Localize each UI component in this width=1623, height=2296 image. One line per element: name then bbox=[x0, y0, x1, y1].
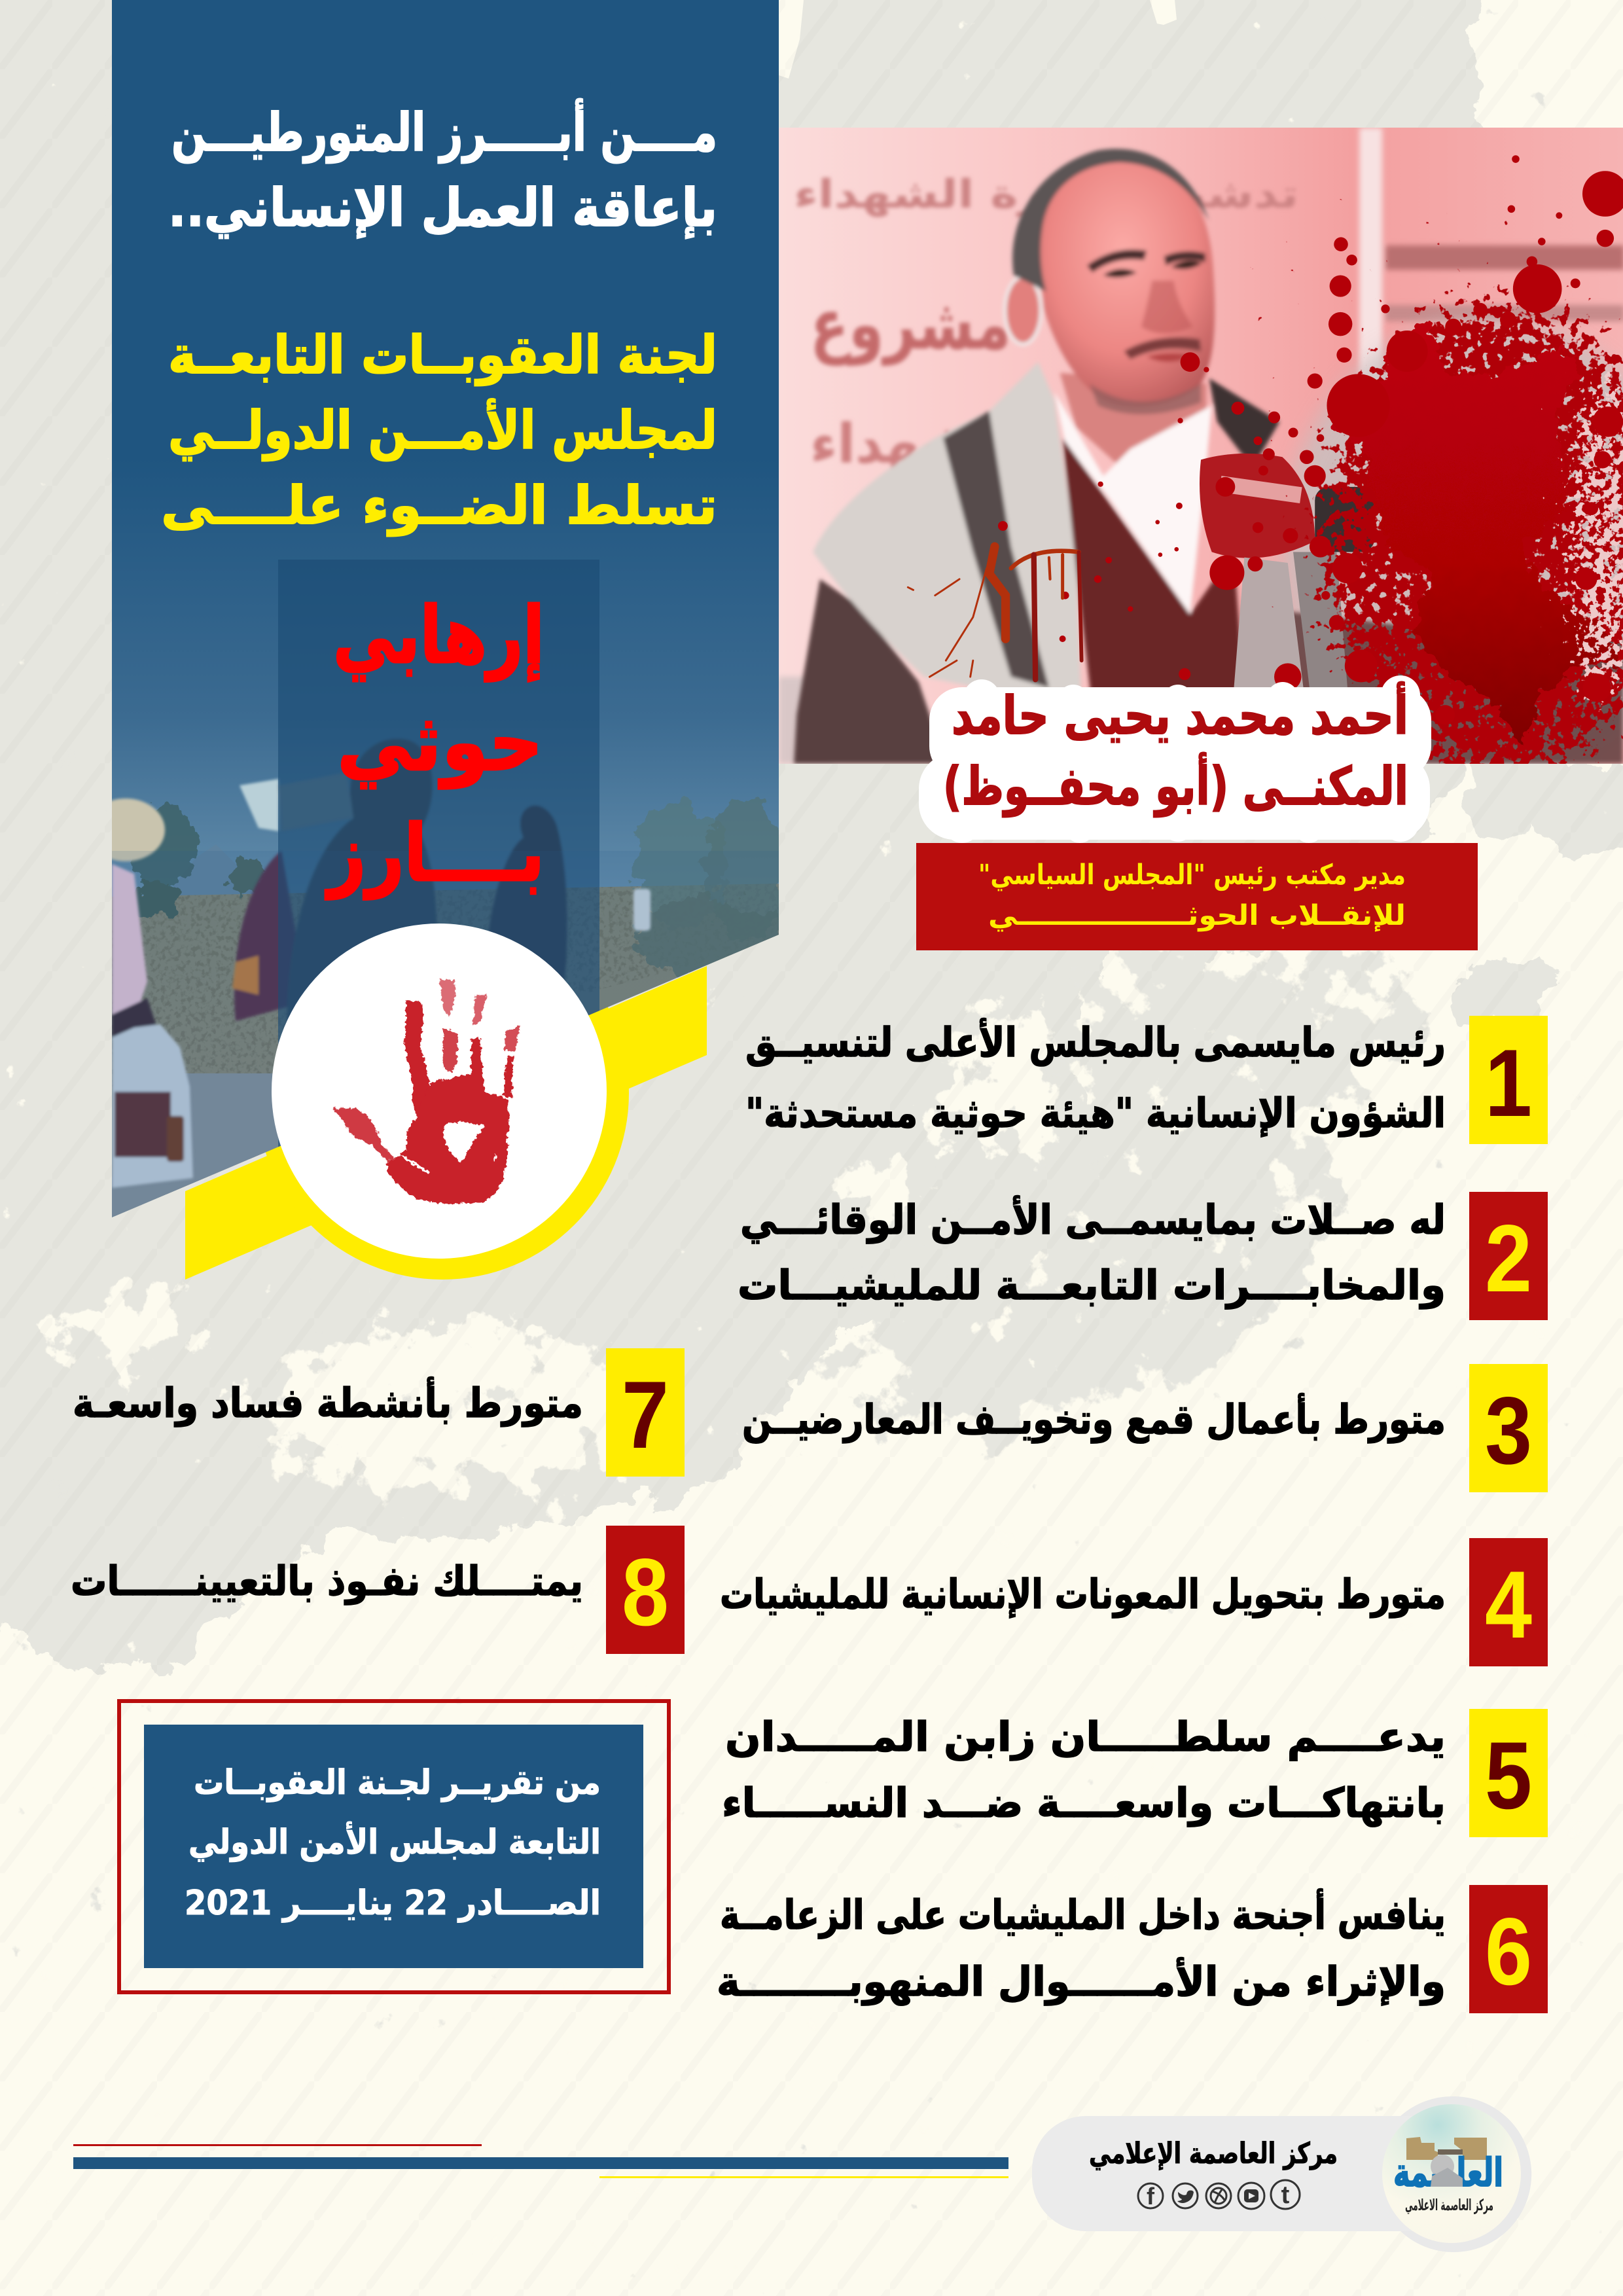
neck bbox=[1060, 373, 1206, 476]
field photo: ground bbox=[112, 884, 779, 1224]
logo: caption: مركز العاصمة الاعلامي bbox=[1405, 2196, 1493, 2214]
title block: yellow heading: تسلط الضــوء علــــى bbox=[161, 475, 717, 537]
list item 5: 5 bbox=[1485, 1722, 1532, 1829]
name plate text: أحمد محمد يحيى حامد bbox=[952, 682, 1408, 746]
title block: yellow heading bbox=[161, 325, 717, 537]
title block: yellow heading: لجنة العقوبــات التابعــة bbox=[168, 325, 717, 386]
list item 6: والإثراء من الأمــــــوال المنهوبــــــــة bbox=[717, 1957, 1446, 2005]
list item 6: ينافس أجنحة داخل المليشيات على الزعامــة bbox=[720, 1888, 1446, 1939]
splatter texture bbox=[1320, 297, 1623, 785]
field photo: bushes and trees bbox=[131, 798, 789, 975]
dark overlay behind red words bbox=[278, 560, 599, 1214]
shawl woven band bbox=[943, 411, 1049, 688]
third figure bbox=[287, 739, 437, 1060]
name plate text bbox=[943, 682, 1408, 817]
field photo: mountain bbox=[173, 876, 252, 895]
blood drops bbox=[998, 155, 1623, 725]
social icons: f bbox=[1147, 2183, 1155, 2210]
list item 5 bbox=[722, 1709, 1548, 1837]
social icons: t bbox=[1281, 2181, 1290, 2209]
name plate: white scalloped background bbox=[919, 675, 1431, 843]
facial features bbox=[1087, 249, 1205, 414]
list item 8 bbox=[71, 1526, 685, 1654]
list item 7 bbox=[73, 1348, 685, 1477]
logo: Al-Asima media center bbox=[1382, 2104, 1521, 2243]
icon: bloody hand print bbox=[332, 980, 520, 1204]
second figure bbox=[234, 851, 308, 1021]
list item 4: متورط بتحويل المعونات الإنسانية للمليشيات bbox=[720, 1570, 1446, 1618]
photo area of grey base under splatter bbox=[1282, 319, 1623, 785]
list item 3 bbox=[742, 1364, 1548, 1492]
pole and building bbox=[779, 128, 1623, 764]
shopping bag bbox=[112, 1024, 193, 1188]
blurred banner text bbox=[794, 172, 1298, 476]
list item 2: 2 bbox=[1485, 1205, 1532, 1312]
title block: red words: بــــارز bbox=[325, 808, 544, 899]
list item 7: متورط بأنشطة فساد واسعـة bbox=[73, 1376, 583, 1427]
blurred banner text: شهداء bbox=[810, 412, 973, 476]
job title box: مدير مكتب رئيس "المجلس السياسي" bbox=[978, 859, 1406, 891]
blurred banner text: تدشين مقبرة الشهداء bbox=[794, 172, 1298, 217]
panel: blue title panel with field photo bbox=[86, 0, 789, 1224]
field photo: sky bbox=[112, 458, 779, 929]
job title box bbox=[916, 843, 1478, 950]
list item 1: 1 bbox=[1485, 1030, 1532, 1136]
title block: white heading: بإعاقة العمل الإنساني.. bbox=[168, 177, 717, 239]
photo: politician with blood splatter bbox=[779, 128, 1623, 785]
source box with red frame: التابعة لمجلس الأمن الدولي bbox=[188, 1821, 601, 1862]
shawl bbox=[813, 362, 1082, 709]
list item 4: 4 bbox=[1485, 1551, 1532, 1658]
logo: outer ring bbox=[1400, 2096, 1531, 2252]
fourth figure bbox=[484, 806, 567, 995]
blood drip on shoulder bbox=[908, 547, 1082, 679]
woman with hat at left bbox=[112, 864, 147, 1021]
photo background bbox=[779, 128, 1623, 764]
photo tint bbox=[112, 851, 779, 1217]
coat sleeve bbox=[794, 579, 946, 764]
ear bbox=[1005, 277, 1041, 344]
blurred banner text: مشروع bbox=[810, 283, 1011, 366]
list item 5: يدعــــم سلطـــــان زابن المـــــدان bbox=[725, 1713, 1446, 1761]
name plate text: المكنــى (أبو محفــوظ) bbox=[943, 753, 1408, 817]
list item 2: له صــلات بمايسمــى الأمــن الوقائـــي bbox=[740, 1195, 1446, 1244]
coat and lower body at right bbox=[1234, 606, 1623, 764]
footer lines bbox=[73, 2144, 1008, 2178]
list item 1: الشؤون الإنسانية "هيئة حوثية مستحدثة" bbox=[745, 1089, 1446, 1137]
list item 1: رئيس مايسمى بالمجلس الأعلى لتنسيــق bbox=[745, 1018, 1446, 1066]
badge: yellow ring bbox=[256, 906, 629, 1280]
list item 7: 7 bbox=[622, 1361, 669, 1468]
yellow ribbon behind hand badge bbox=[185, 966, 707, 1280]
face bbox=[1038, 161, 1215, 406]
field photo: people bbox=[86, 739, 651, 1188]
list item 5: بانتهاكـــات واسعــــة ضـــد النســـــاء bbox=[722, 1779, 1446, 1827]
large blood blot bbox=[1331, 324, 1623, 753]
panel solid blue top bbox=[112, 0, 779, 459]
source box with red frame bbox=[119, 1701, 669, 1992]
logo: grey globe bbox=[1431, 2155, 1454, 2178]
source box with red frame: الصــــادر 22 ينايــــر 2021 bbox=[185, 1884, 601, 1923]
list item 2 bbox=[738, 1192, 1548, 1320]
background world map texture bbox=[0, 0, 1623, 1676]
job title box: للإنقــلاب الحوثـــــــــــــــــي bbox=[988, 899, 1406, 932]
title block: white heading bbox=[168, 99, 717, 239]
distant figure bbox=[633, 889, 651, 931]
field photo: road bbox=[112, 1073, 288, 1217]
footer pill bbox=[1032, 2116, 1490, 2231]
microphones bbox=[1200, 454, 1374, 693]
social icons bbox=[1138, 2180, 1300, 2210]
logo: buildings bbox=[1406, 2137, 1487, 2160]
title block: red words bbox=[325, 590, 544, 899]
footer organisation name: مركز العاصمة الإعلامي bbox=[1089, 2137, 1338, 2170]
list item 4 bbox=[720, 1538, 1548, 1666]
hair bbox=[1012, 149, 1209, 291]
shirt bbox=[1054, 392, 1212, 615]
list item 3: 3 bbox=[1485, 1377, 1532, 1484]
pale flecks at right of blot bbox=[1565, 367, 1623, 715]
list item 8: 8 bbox=[622, 1539, 669, 1645]
title block: yellow heading: لمجلس الأمـــن الدولــي bbox=[168, 399, 717, 461]
list item 2: والمخابــــرات التابعـــة للمليشيـــات bbox=[738, 1261, 1446, 1309]
title block: white heading: مــــن أبـــــرز المتورطيـــن bbox=[171, 99, 717, 164]
title block: red words: إرهابي bbox=[333, 590, 544, 682]
man figure bbox=[794, 149, 1279, 764]
logo: blue wordmark: العاصمة bbox=[1393, 2150, 1503, 2196]
badge: white circle bbox=[272, 924, 607, 1259]
list item 3: متورط بأعمال قمع وتخويــف المعارضيــن bbox=[742, 1393, 1446, 1443]
source box with red frame: من تقريــر لجـنة العقوبــات bbox=[194, 1763, 601, 1803]
list item 1 bbox=[745, 1016, 1548, 1144]
list item 8: يمتــــلك نفـوذ بالتعيينــــــات bbox=[71, 1557, 583, 1605]
list item 6: 6 bbox=[1485, 1898, 1532, 2005]
logo: grey accent bbox=[1431, 2168, 1463, 2187]
right collar shadow bbox=[1209, 378, 1279, 468]
title block: red words: حوثي bbox=[337, 698, 543, 789]
vest bbox=[1063, 438, 1244, 709]
field photo: ground grain bbox=[112, 884, 779, 1086]
list item 6 bbox=[717, 1885, 1548, 2013]
